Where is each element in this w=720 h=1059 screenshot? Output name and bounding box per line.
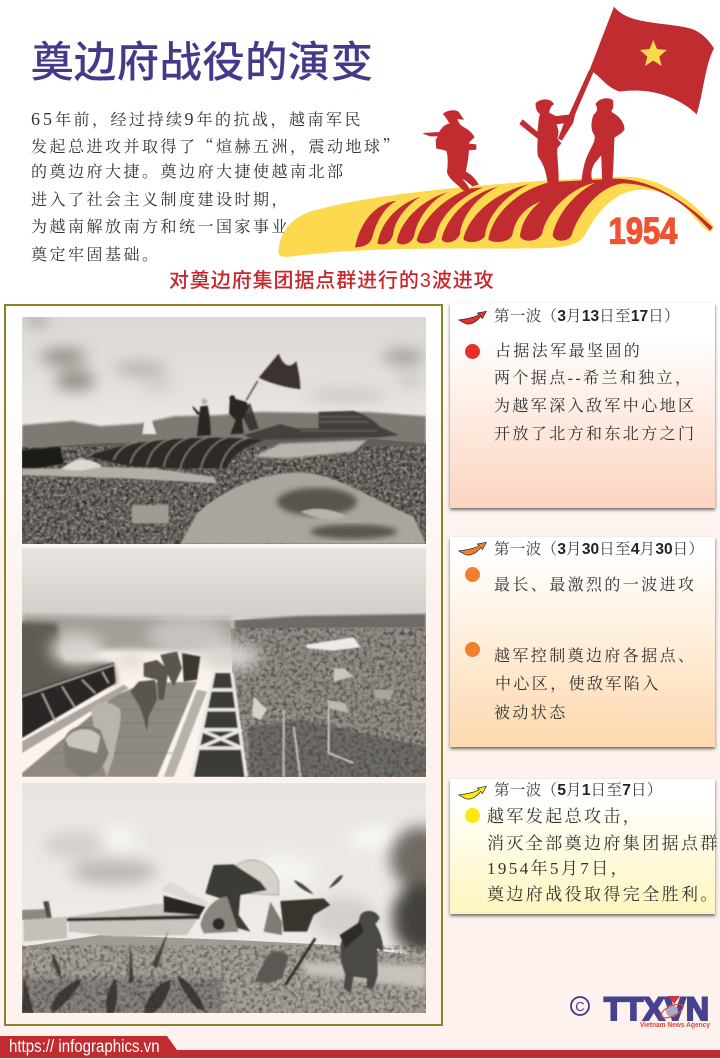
intro text block: 进入了社会主义制度建设时期， (31, 192, 290, 209)
footer URL: https:// infographics.vn (9, 1036, 160, 1056)
second wave text two: 中心区，使敌军陷入 (495, 676, 661, 693)
intro text block: 发起总进攻并取得了“煊赫五洲，震动地球” (31, 134, 401, 157)
intro text block: 的奠边府大捷。奠边府大捷使越南北部 (31, 164, 346, 181)
panel: first wave (450, 303, 715, 508)
intro text block: 奠定牢固基础。 (31, 247, 161, 264)
icon: yellow bullet (465, 808, 480, 823)
soldier standing (582, 99, 624, 182)
panel: third wave (450, 779, 715, 914)
quonset hut (89, 438, 264, 468)
TTXVN wordmark: TTXVN (604, 991, 709, 1027)
third wave text (487, 807, 720, 904)
flag star (640, 40, 667, 66)
wooden deck (22, 681, 197, 777)
soldier running with bayonet (423, 111, 478, 193)
second wave text two: 越军控制奠边府各据点、 (494, 648, 696, 665)
icon: red bullet (465, 344, 480, 359)
red fingers of the hill (355, 179, 713, 247)
agency tagline: Vietnam News Agency (640, 1022, 710, 1029)
photo: soldiers crossing the bridge (22, 548, 476, 942)
third wave text: 奠边府战役取得完全胜利。 (487, 885, 720, 904)
copyright symbol: C (575, 999, 585, 1014)
icon: orange arrow (458, 542, 487, 556)
second wave text two (494, 647, 696, 722)
far framework (244, 411, 399, 439)
first wave text: 占据法军最坚固的 (495, 343, 642, 360)
yellow hill (278, 177, 714, 257)
foreground plants (22, 930, 205, 1013)
second wave text one: 最长、最激烈的一波进攻 (494, 577, 696, 594)
copyright and agency logo (570, 991, 710, 1029)
intro text block: 65年前，经过持续9年的抗战，越南军民 (31, 109, 363, 129)
panel: second wave (450, 537, 715, 747)
left truss (22, 662, 115, 738)
icon: orange bullet (465, 642, 480, 657)
soldier running (340, 911, 383, 993)
soldiers on the bridge (130, 652, 182, 731)
subheading: 对奠边府集团据点群进行的3波进攻 (169, 270, 495, 292)
title: 奠边府战役的演变 (31, 40, 373, 87)
distant hill (22, 909, 50, 920)
ground (22, 935, 426, 1013)
icon: red arrow (458, 310, 487, 324)
first wave text: 两个据点--希兰和独立， (494, 370, 693, 387)
third wave heading: 第一波（5月1日至7日） (494, 782, 663, 799)
icon: yellow arrow (458, 786, 487, 800)
parachute tent (142, 408, 156, 434)
third wave text: 越军发起总攻击， (487, 807, 642, 826)
footer bar with URL tab (0, 916, 720, 1058)
white bridge truss (190, 673, 248, 777)
soldier raising flag (520, 71, 593, 183)
second wave heading: 第一波（3月30日至4月30日） (494, 541, 704, 558)
globe (659, 996, 685, 1021)
icon: orange bullet (465, 567, 480, 582)
second wave text two: 被动状态 (494, 705, 568, 722)
flag (589, 7, 714, 114)
third wave text: 1954年5月7日， (487, 859, 630, 878)
dark smoke (310, 827, 452, 955)
first wave text: 为越军深入敌军中心地区 (494, 398, 696, 415)
panel: photo frame (4, 304, 443, 1026)
wreck (69, 903, 200, 937)
copyright symbol (571, 997, 589, 1015)
intro text block (31, 109, 401, 264)
intro text block: 为越南解放南方和统一国家事业 (31, 219, 290, 236)
year 1954: 1954 (609, 210, 678, 252)
first wave text: 开放了北方和东北方之门 (494, 426, 696, 443)
photo: flag over the bunker (22, 317, 684, 1017)
first wave heading: 第一波（3月13日至17日） (494, 308, 680, 325)
battle flag (259, 354, 300, 389)
soldiers (192, 399, 259, 436)
hero illustration: soldiers, flag, hill (278, 6, 714, 257)
first wave text (494, 342, 696, 443)
third wave text: 消灭全部奠边府集团据点群 (487, 834, 720, 853)
photo: wrecked aircraft (22, 783, 426, 1013)
